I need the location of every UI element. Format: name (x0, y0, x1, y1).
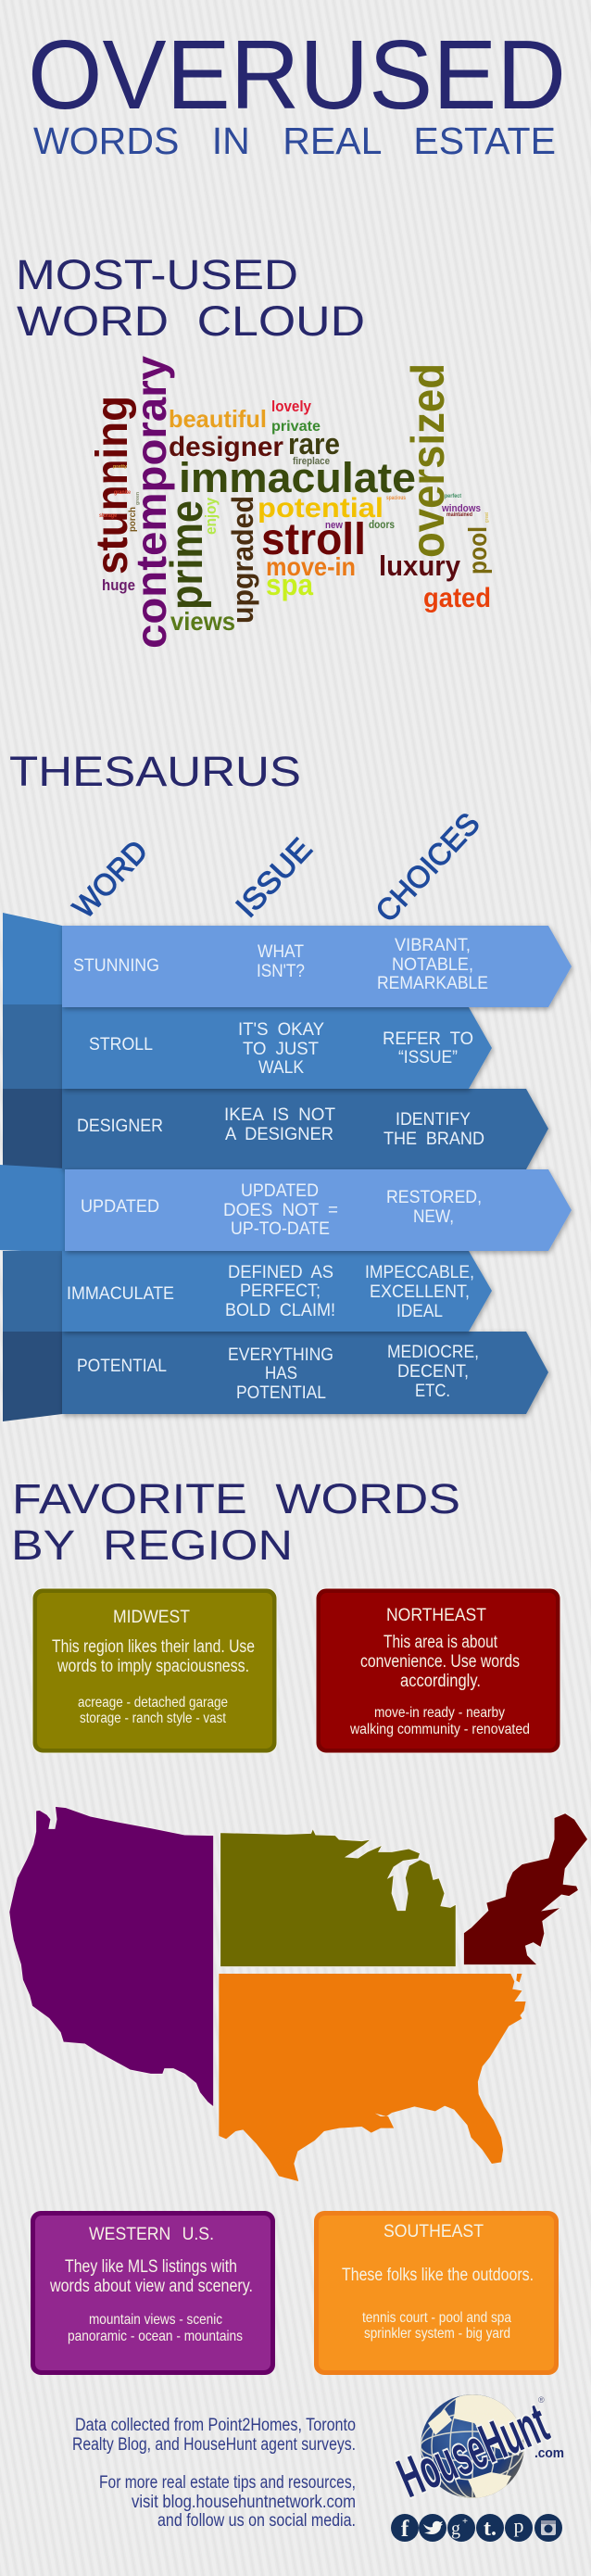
word: private: private (271, 419, 321, 435)
icon: facebook: f (401, 2517, 409, 2542)
panel body: midwest (52, 1637, 255, 1676)
row: potential: DECENT, (397, 1362, 469, 1382)
panel words: southeast (362, 2310, 511, 2342)
row: immaculate (67, 1263, 474, 1321)
row: updated (81, 1181, 482, 1239)
icon: twitter (419, 2514, 446, 2542)
panel body: northeast (360, 1633, 520, 1691)
row: immaculate: IMMACULATE (67, 1284, 174, 1304)
column header: issue: ISSUE (229, 831, 319, 924)
footer text: sources and follow: visit blog.househuntnetwork.com (132, 2493, 356, 2512)
word: stroll: stroll (261, 515, 366, 564)
word: beautiful: beautiful (169, 405, 267, 433)
row: stunning: NOTABLE, (392, 955, 473, 975)
row: designer: A DESIGNER (225, 1125, 333, 1144)
panel words: midwest: acreage - detached garage (78, 1695, 228, 1711)
map region: northeast (463, 1813, 588, 1965)
word: potential: potential (258, 493, 384, 524)
panel words: western: panoramic - ocean - mountains (68, 2329, 243, 2344)
logo: househunt globe (395, 2394, 563, 2499)
row: updated: UPDATED (81, 1197, 159, 1217)
panel words: northeast: walking community - renovated (349, 1722, 530, 1737)
icon: tumblr: t. (484, 2517, 497, 2541)
row: stunning: WHAT (258, 942, 304, 962)
panel words: midwest: storage - ranch style - vast (80, 1711, 226, 1726)
heading: thesaurus: THESAURUS (9, 748, 301, 795)
panel body: midwest: words to imply spaciousness. (57, 1657, 249, 1676)
row: stunning: ISN'T? (257, 962, 305, 981)
footer text: sources and follow (72, 2416, 356, 2531)
panel body: southeast: These folks like the outdoors. (342, 2266, 534, 2285)
word: oversized: oversized (402, 363, 454, 558)
column header: word: WORD (66, 833, 154, 925)
word: views: views (170, 607, 235, 636)
panel: northeast (316, 1588, 560, 1753)
word: great: great (484, 512, 490, 523)
row: updated: RESTORED, (386, 1188, 482, 1207)
word: perfect: perfect (445, 494, 461, 499)
footer text: sources and follow: and follow us on social media. (157, 2511, 356, 2531)
row: stroll: IT'S OKAY (238, 1020, 324, 1040)
row: updated: UP-TO-DATE (231, 1219, 330, 1239)
map of the United States (9, 1806, 588, 2181)
panel heading: northeast: NORTHEAST (386, 1606, 486, 1625)
panel words: southeast: tennis court - pool and spa (362, 2310, 511, 2326)
map region: southeast (219, 1974, 526, 2181)
row: stunning (73, 936, 488, 993)
word: luxury: luxury (379, 549, 461, 582)
thesaurus table (0, 913, 572, 1421)
social icons (391, 2514, 562, 2542)
panel heading: southeast: SOUTHEAST (384, 2222, 484, 2241)
panel: southeast (314, 2211, 559, 2375)
panel body: western: words about view and scenery. (49, 2277, 253, 2296)
band: stroll arrow (62, 1007, 492, 1089)
word: windows: windows (441, 503, 481, 514)
panel words: midwest (78, 1695, 228, 1726)
icon: google plus (447, 2514, 475, 2542)
heading: most-used word cloud (16, 251, 365, 345)
row: potential: EVERYTHING (228, 1345, 333, 1365)
row: immaculate: IMPECCABLE, (365, 1263, 474, 1282)
row: stroll: STROLL (89, 1035, 153, 1054)
panel words: western (68, 2312, 243, 2344)
icon: google plus: + (462, 2517, 468, 2527)
band tabs (0, 913, 65, 1421)
row: designer (77, 1105, 484, 1149)
word: contemporary: contemporary (127, 356, 175, 649)
word cloud (88, 356, 492, 649)
panel body: northeast: This area is about (384, 1633, 498, 1652)
word: lovely: lovely (271, 398, 311, 415)
word: doors: doors (369, 518, 395, 531)
row: immaculate: PERFECT; (240, 1282, 321, 1301)
band: updated arrow (65, 1169, 572, 1251)
title: OVERUSED (28, 20, 566, 130)
panel: midwest (32, 1588, 277, 1753)
row: stunning: STUNNING (73, 956, 159, 976)
word: granite: granite (114, 490, 132, 496)
row: stroll (89, 1020, 473, 1078)
icon: pinterest: p (513, 2514, 524, 2537)
row: potential: POTENTIAL (77, 1357, 167, 1376)
row: stunning: VIBRANT, (395, 936, 471, 955)
panel heading: midwest: MIDWEST (113, 1608, 190, 1627)
panel body: western: They like MLS listings with (65, 2257, 237, 2277)
word: enjoy: enjoy (202, 498, 220, 535)
logo .com: .com (534, 2445, 564, 2461)
row: designer: THE BRAND (384, 1130, 484, 1149)
heading: most-used word cloud: MOST-USED (16, 251, 298, 298)
word: pretty: pretty (113, 464, 127, 470)
row: updated: NEW, (413, 1207, 454, 1227)
heading: favorite words by region (11, 1475, 460, 1569)
map region: west (9, 1806, 214, 2107)
row: stroll: WALK (258, 1058, 304, 1078)
word: move-in: move-in (266, 552, 356, 581)
panel words: northeast (349, 1705, 530, 1737)
column header: choices: CHOICES (369, 806, 486, 928)
panel body: western (49, 2257, 253, 2296)
band: immaculate arrow (62, 1251, 492, 1332)
row: potential: ETC. (415, 1382, 450, 1401)
row: potential: HAS (265, 1364, 297, 1383)
row: immaculate: DEFINED AS (228, 1263, 333, 1282)
panel words: northeast: move-in ready - nearby (374, 1705, 505, 1721)
map region: midwest (220, 1828, 456, 1967)
footer text: sources and follow: Realty Blog, and HouseHunt agent surveys. (72, 2435, 356, 2455)
heading: favorite words by region: FAVORITE WORDS (12, 1475, 460, 1522)
panel body: northeast: convenience. Use words (360, 1652, 520, 1672)
word: designer: designer (169, 432, 283, 462)
icon: globe (421, 2394, 524, 2500)
word: upgraded: upgraded (226, 496, 259, 624)
row: stunning: REMARKABLE (377, 974, 488, 993)
row: potential: MEDIOCRE, (387, 1343, 479, 1362)
band: designer arrow (62, 1089, 548, 1169)
word: spacious: spacious (386, 496, 407, 501)
logo registered mark: ® (538, 2395, 545, 2405)
panel body: midwest: This region likes their land. Use (52, 1637, 255, 1657)
heading: most-used word cloud: WORD CLOUD (17, 297, 365, 345)
row: designer: IKEA IS NOT (224, 1105, 335, 1125)
icon: instagram (534, 2514, 562, 2542)
icon: tumblr (476, 2514, 504, 2542)
word: immaculate: immaculate (179, 454, 416, 501)
icon: google plus: g (451, 2519, 460, 2539)
panel: western u.s. (31, 2211, 275, 2375)
word: fireplace: fireplace (293, 456, 330, 467)
word: spa: spa (266, 568, 313, 601)
word: gated: gated (423, 583, 491, 613)
row: stroll: TO JUST (243, 1040, 319, 1059)
subtitle: WORDS IN REAL ESTATE (33, 120, 556, 162)
row: designer: DESIGNER (77, 1117, 163, 1136)
band: stunning arrow (62, 926, 572, 1007)
row: immaculate: BOLD CLAIM! (225, 1301, 335, 1320)
row: stroll: “ISSUE” (398, 1048, 458, 1067)
word: storage: storage (99, 513, 118, 519)
row: potential: POTENTIAL (236, 1383, 326, 1403)
row: designer: IDENTIFY (396, 1110, 471, 1130)
band: potential arrow (62, 1332, 548, 1414)
icon: facebook (391, 2514, 419, 2542)
panel words: southeast: sprinkler system - big yard (364, 2326, 510, 2342)
footer text: sources and follow: For more real estate tips and resources, (99, 2473, 356, 2493)
word: stunning: stunning (88, 396, 137, 575)
panel heading: western: WESTERN U.S. (89, 2225, 214, 2244)
row: updated: UPDATED (241, 1181, 319, 1201)
word: new: new (325, 520, 343, 531)
row: updated: DOES NOT = (223, 1201, 338, 1220)
row: potential (77, 1343, 479, 1403)
panel words: western: mountain views - scenic (89, 2312, 222, 2328)
row: immaculate: EXCELLENT, (370, 1282, 470, 1302)
heading: favorite words by region: BY REGION (11, 1522, 293, 1569)
row: stroll: REFER TO (383, 1029, 473, 1049)
word: huge: huge (102, 576, 135, 594)
word: pool: pool (463, 526, 492, 575)
icon: pinterest (505, 2514, 533, 2542)
footer text: sources and follow: Data collected from Point2Homes, Toronto (75, 2416, 356, 2435)
word: maintained: maintained (446, 512, 472, 518)
word: prime: prime (162, 500, 212, 610)
word: porch: porch (128, 507, 138, 532)
row: immaculate: IDEAL (396, 1302, 443, 1321)
word: green: green (135, 492, 141, 505)
word: rare: rare (288, 427, 340, 461)
panel body: northeast: accordingly. (400, 1672, 481, 1691)
